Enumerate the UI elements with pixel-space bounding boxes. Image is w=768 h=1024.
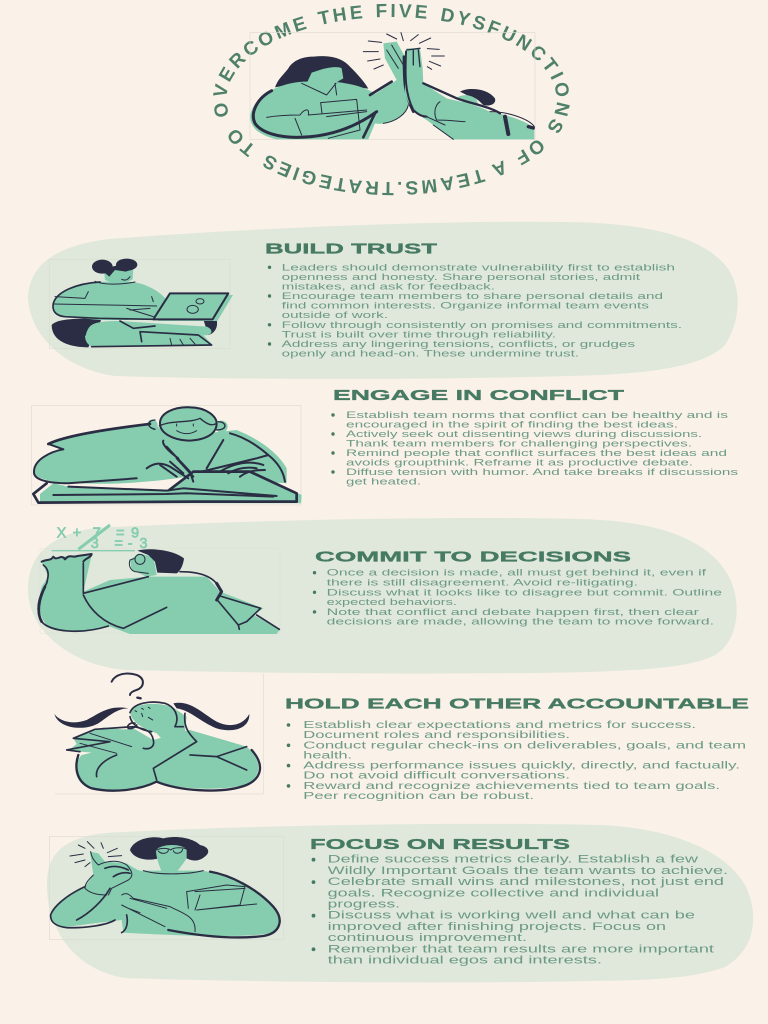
bullet list: commit to decisions [313,568,722,628]
bullet list: engage in conflict: avoids groupthink. Reframe it as productive debate. [346,458,693,468]
bullet list: commit to decisions: Discuss what it looks like to disagree but commit. Outline [327,587,722,598]
heading: build trust: BUILD TRUST [265,240,437,258]
bullet list: hold each other accountable: health. [303,750,352,761]
illustration: two people high-fiving [250,33,535,139]
bullet list: focus on results: goals. Recognize collective and individual [328,887,659,899]
math equations: X+7=9 [57,525,139,541]
bullet list: build trust: Encourage team members to share personal details and [282,291,663,302]
bullet list: commit to decisions: decisions are made, allowing the team to move forward. [327,617,714,628]
bullet list: engage in conflict: get heated. [346,476,421,488]
bullet list: engage in conflict [331,410,738,488]
bullet list: build trust: find common interests. Organize informal team events [282,301,649,312]
bullet list: focus on results: Define success metrics clearly. Establish a few [328,854,698,866]
bullet list: focus on results: continuous improvement. [328,932,527,944]
bullet list: engage in conflict: Remind people that conflict surfaces the best ideas and [346,448,727,459]
bullet list: commit to decisions: Once a decision is made, all must get behind it, even if [327,568,707,579]
illustration: person writing math on a board [38,525,280,634]
math equations [52,525,147,552]
panel background blob [47,824,753,982]
bullet list: hold each other accountable: Document roles and responsibilities. [303,730,570,741]
illustration: thinking person with question mark [54,673,263,794]
bullet list: hold each other accountable: Establish clear expectations and metrics for success. [303,720,696,731]
heading: commit to decisions: COMMIT TO DECISIONS [315,548,631,566]
panel: engage in conflict [32,387,738,505]
heading: focus on results: FOCUS ON RESULTS [310,836,570,853]
bullet list: build trust: Follow through consistently on promises and commitments. [282,320,682,331]
bullet list: focus on results: than individual egos and interests. [328,954,602,966]
panel background blob [28,518,737,673]
panel: focus on results [47,824,753,982]
title: circular heading with high-five illustration [213,4,570,196]
bullet list: build trust: Leaders should demonstrate vulnerability first to establish [282,262,675,273]
bullet list: hold each other accountable: Do not avoid difficult conversations. [303,771,570,782]
bullet list: build trust: Address any lingering tensions, conflicts, or grudges [282,339,635,350]
bullet list: build trust [268,262,682,360]
bullet list: hold each other accountable: Reward and recognize achievements tied to team goals. [303,781,720,792]
bullet list: build trust: mistakes, and ask for feedback. [282,282,495,292]
bullet list: hold each other accountable: Address performance issues quickly, directly, and factually. [303,761,740,772]
bullet list: hold each other accountable [287,720,746,802]
illustration: person on laptop [49,259,233,348]
bullet list: engage in conflict: Actively seek out dissenting views during discussions. [346,429,702,440]
bullet list: engage in conflict: encouraged in the spirit of finding the best ideas. [346,420,678,430]
heading: hold each other accountable: HOLD EACH OTHER ACCOUNTABLE [285,696,749,712]
math equations: 3=-3 [91,536,147,552]
illustration: person writing in a book [32,406,302,505]
bullet list: commit to decisions: Note that conflict and debate happen first, then clear [327,607,699,618]
bullet list: focus on results: improved after finishing projects. Focus on [328,921,666,933]
panel: commit to decisions [28,518,737,673]
bullet list: hold each other accountable: Conduct regular check-ins on deliverables, goals, and team [303,740,746,751]
question mark [112,674,143,698]
bullet list: engage in conflict: Thank team members for challenging perspectives. [346,438,692,450]
bullet list: focus on results: Wildly Important Goals the team wants to achieve. [328,865,728,877]
bullet list: focus on results: Celebrate small wins and milestones, not just end [328,876,724,888]
bullet list: build trust: openly and head-on. These undermine trust. [282,348,579,360]
illustration: person giving thumbs up with books [49,837,283,939]
bullet list: engage in conflict: Establish team norms that conflict can be healthy and is [346,410,728,421]
bullet list: build trust: outside of work. [282,310,388,321]
bullet list: focus on results: progress. [328,898,400,910]
bullet list: engage in conflict: Diffuse tension with humor. And take breaks if discussions [346,467,738,478]
bullet list: focus on results: Remember that team results are more important [328,943,714,955]
bullet list: focus on results: Discuss what is working well and what can be [328,910,695,922]
circular title text: TEAMS.TRATEGIES TO OVERCOME THE FIVE DYSFUNCTIONS OF A [213,4,570,196]
bullet list: build trust: Trust is built over time through reliability. [282,329,556,340]
bullet list: hold each other accountable: Peer recognition can be robust. [303,791,534,802]
bullet list: build trust: openness and honesty. Share personal stories, admit [282,272,641,283]
bullet list: focus on results [312,854,728,966]
panel: build trust [28,222,738,379]
panel: hold each other accountable [54,673,749,802]
panel background blob [28,222,738,379]
bullet list: commit to decisions: there is still disagreement. Avoid re-litigating. [327,578,638,588]
bullet list: commit to decisions: expected behaviors. [327,597,457,608]
heading: engage in conflict: ENGAGE IN CONFLICT [333,387,624,404]
